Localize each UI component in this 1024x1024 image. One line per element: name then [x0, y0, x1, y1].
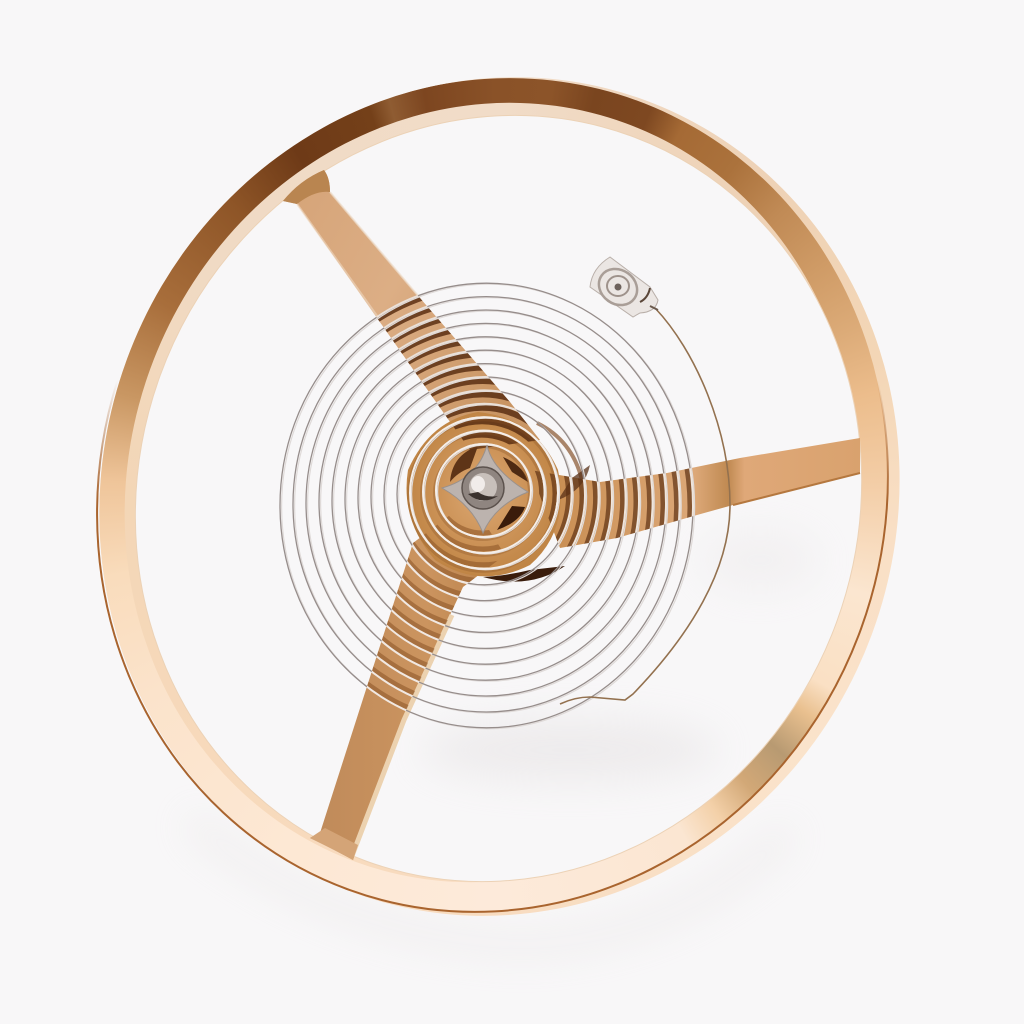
three-armed spokes — [283, 170, 860, 860]
lower arm — [310, 500, 505, 860]
rim polished face — [99, 78, 888, 911]
right arm — [530, 438, 860, 548]
roller edge — [537, 423, 582, 480]
hairspring coils — [280, 283, 695, 729]
stud — [590, 257, 658, 317]
balance staff pivot — [462, 467, 504, 509]
hairspring overcoil — [560, 308, 730, 704]
upper arm — [283, 170, 540, 450]
balance wheel artwork — [96, 115, 889, 913]
central hub — [407, 412, 590, 582]
silver collet — [442, 445, 528, 533]
balance wheel rim — [99, 77, 900, 916]
hairspring shadows on arms — [277, 279, 692, 732]
